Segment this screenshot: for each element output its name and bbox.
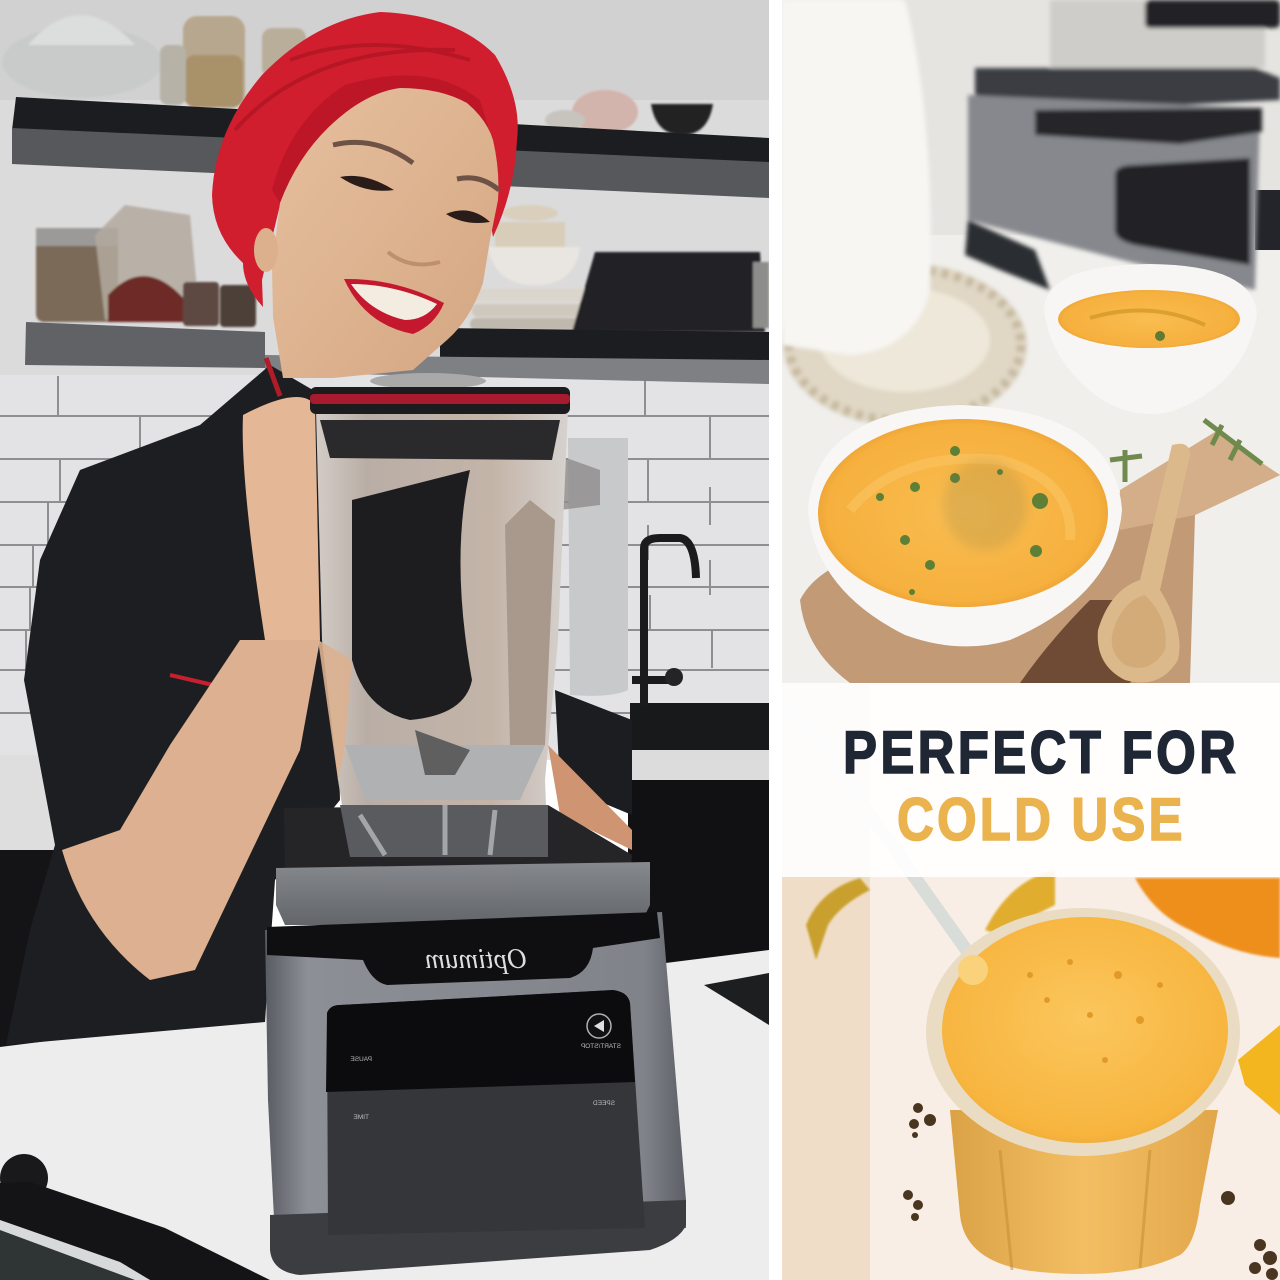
small bowl xyxy=(1044,264,1257,414)
large bowl xyxy=(808,405,1122,646)
herbs and seeds xyxy=(876,446,1048,595)
mango top right xyxy=(1135,878,1280,958)
white vase xyxy=(782,0,931,355)
device lower part xyxy=(0,1230,135,1280)
wooden spoon xyxy=(1098,444,1190,682)
eyes and brows xyxy=(333,142,499,190)
jacket xyxy=(6,365,340,1045)
top shelf xyxy=(12,97,769,198)
lower shelf xyxy=(25,322,769,384)
panel: chef with blender photo xyxy=(0,0,769,1280)
lower cabinets xyxy=(0,755,769,1050)
chef xyxy=(6,12,632,1045)
counter xyxy=(0,950,769,1280)
logo (mirrored as in the photo): Optimum xyxy=(425,944,527,975)
panel gloss xyxy=(326,990,635,1092)
smile xyxy=(344,279,444,334)
sink and faucet xyxy=(630,538,769,795)
panel: soup bowls photo xyxy=(782,0,1280,683)
forearm xyxy=(62,640,320,980)
face xyxy=(272,88,498,378)
banana xyxy=(806,878,870,960)
control panel xyxy=(327,990,645,1235)
jar bottom collar xyxy=(340,805,548,857)
control labels (mirrored as in the photo): SPEED xyxy=(593,1100,615,1107)
banner veil xyxy=(782,683,1280,877)
table and wall xyxy=(782,0,1280,683)
black mat on counter xyxy=(704,973,769,1025)
heading line 2: COLD USE xyxy=(897,786,1186,853)
start button xyxy=(587,1014,611,1038)
blurred blender xyxy=(965,0,1280,290)
control labels (mirrored as in the photo): PAUSE xyxy=(350,1056,372,1063)
heading: perfect for cold use xyxy=(843,719,1239,853)
nose shadow xyxy=(388,252,440,264)
glass xyxy=(926,908,1240,1274)
mango right xyxy=(1238,1025,1280,1115)
woven mat xyxy=(783,263,1027,427)
device highlight xyxy=(0,1220,150,1280)
control labels (mirrored as in the photo): TIME xyxy=(353,1114,369,1121)
right arm xyxy=(548,745,632,850)
device handle xyxy=(0,1182,270,1280)
handle xyxy=(568,438,628,696)
control labels (mirrored as in the photo) xyxy=(350,1043,621,1121)
control labels (mirrored as in the photo): START/STOP xyxy=(581,1043,621,1050)
foot xyxy=(270,1200,686,1275)
straw xyxy=(785,695,970,955)
thyme sprigs xyxy=(1110,420,1262,482)
lower shelf items xyxy=(36,205,769,332)
blender base xyxy=(265,805,686,1275)
marble backdrop xyxy=(782,683,1280,1280)
heading line 1: PERFECT FOR xyxy=(843,719,1239,786)
kitchen wall xyxy=(0,0,769,760)
top shelf items xyxy=(2,15,713,135)
seeds xyxy=(903,1103,1278,1280)
jar xyxy=(316,412,568,805)
lid xyxy=(370,373,486,387)
hand xyxy=(243,397,320,640)
blender jug xyxy=(310,373,628,857)
black band xyxy=(267,912,660,985)
banana slice upper xyxy=(985,870,1055,935)
body xyxy=(265,912,686,1238)
wooden board xyxy=(800,432,1280,683)
ear xyxy=(254,228,278,272)
device ring xyxy=(0,1154,48,1188)
panel: smoothie photo xyxy=(782,683,1280,1280)
turban xyxy=(212,12,518,307)
handheld device on counter xyxy=(0,1154,270,1280)
